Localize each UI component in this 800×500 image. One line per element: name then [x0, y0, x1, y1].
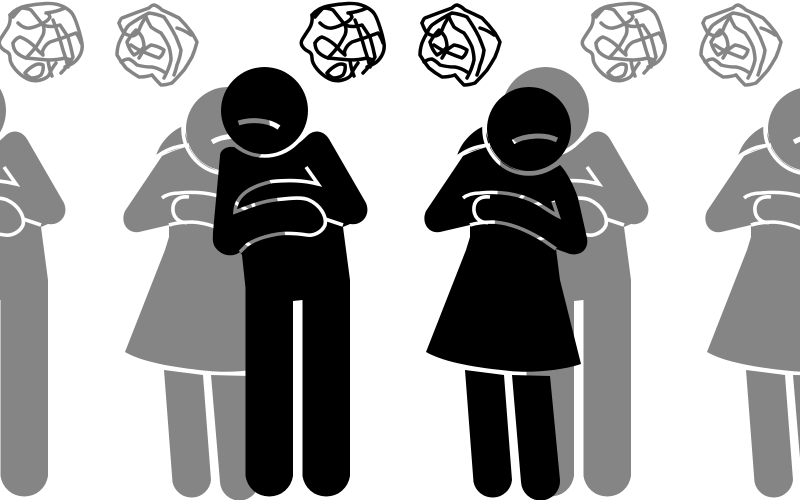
- gray man, right: [494, 67, 648, 497]
- gray thought tangle, left: [117, 5, 197, 85]
- black thought tangle over man: [301, 3, 384, 81]
- gray man, far left: [0, 67, 65, 497]
- gray woman, far right: [705, 87, 800, 500]
- black thought tangle over woman: [420, 5, 500, 85]
- gray woman, left: [123, 87, 286, 500]
- black man with crossed arms: [213, 67, 367, 497]
- black woman with crossed arms: [424, 87, 587, 500]
- gray thought tangle, far left: [0, 3, 82, 81]
- gray thought tangle, right: [582, 3, 665, 81]
- gray thought tangle, far right: [701, 5, 781, 85]
